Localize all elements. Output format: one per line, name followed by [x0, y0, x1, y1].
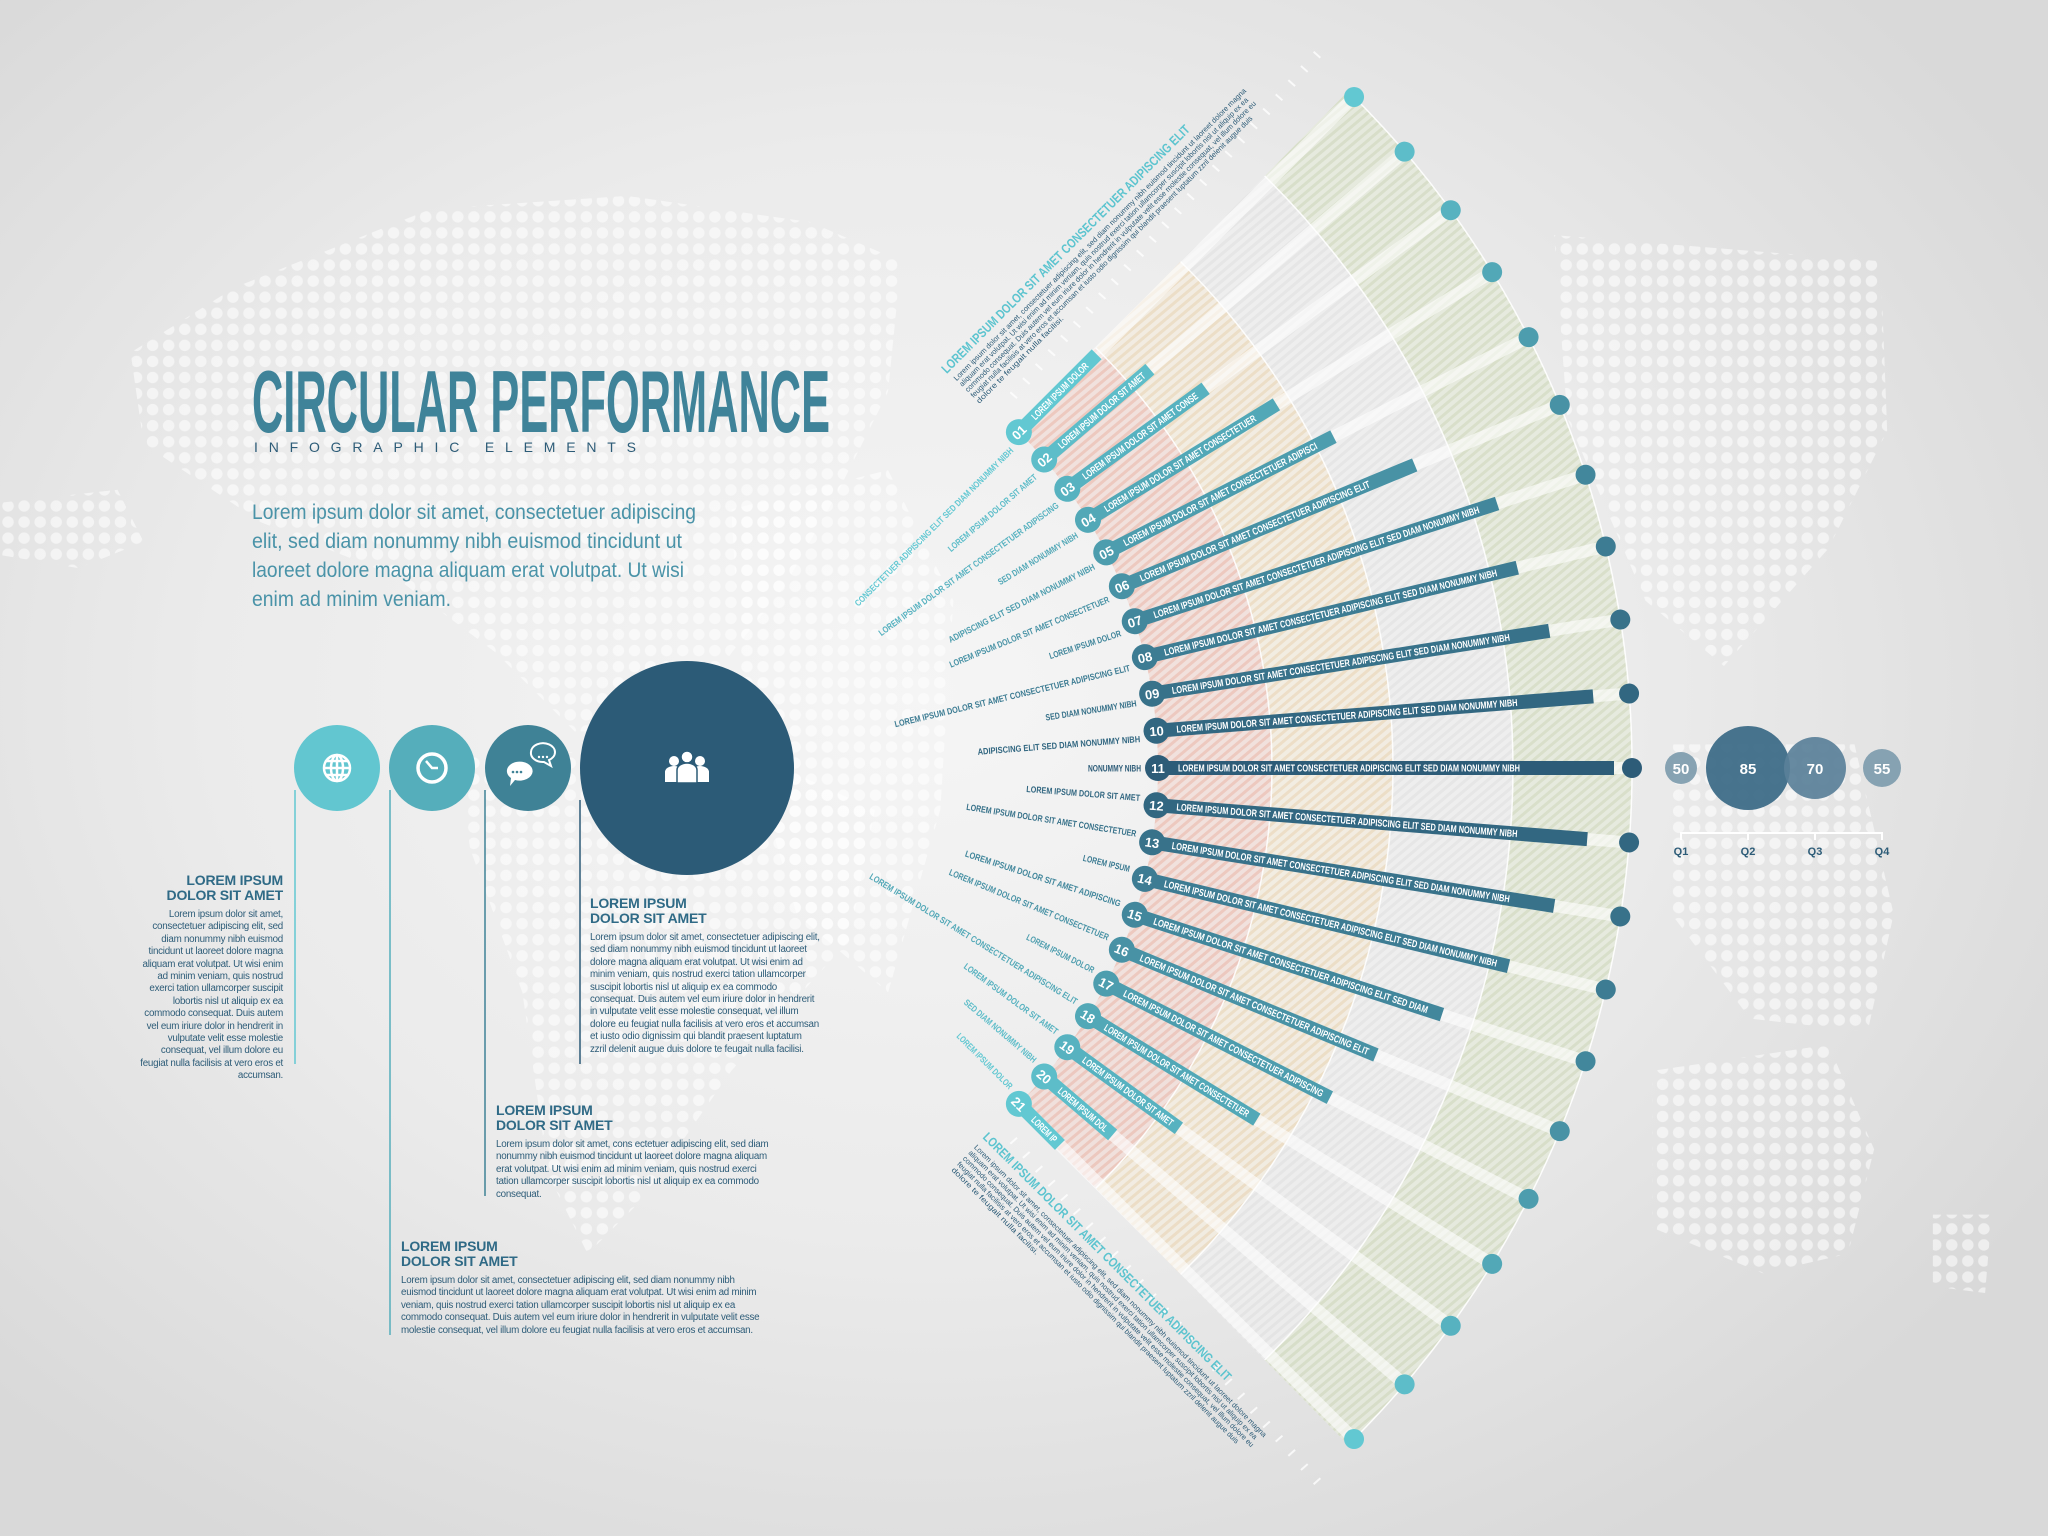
- ray 18: [860, 870, 1507, 1280]
- bubble chart Q1-Q4: Q2: [1741, 846, 1755, 858]
- ray 18: LOREM IPSUM DOLOR SIT AMET CONSECTETUER: [1102, 1023, 1251, 1120]
- bubble chart Q1-Q4: 55: [1874, 761, 1890, 778]
- text block: globe: DOLOR SIT AMET: [167, 887, 283, 903]
- bubble chart Q1-Q4: 70: [1807, 761, 1823, 778]
- ray 15: 15: [1125, 906, 1144, 925]
- ray 13: LOREM IPSUM DOLOR SIT AMET CONSECTETUER: [966, 802, 1137, 839]
- rotated text block: top: aliquam erat volutpat. Ut wisi enim ad minim veniam, quis nostrud exerci tation ullamcorper suscipit lobortis nisl ut aliquip ex ea: [957, 95, 1251, 388]
- icon: chat: [485, 725, 571, 811]
- ray 04: LOREM IPSUM DOLOR SIT AMET CONSECTETUER: [1103, 413, 1259, 515]
- band: gray ring: [1181, 176, 1513, 1360]
- intro paragraph: Lorem ipsum dolor sit amet, consectetuer adipiscing: [252, 501, 696, 524]
- ray 08: LOREM IPSUM DOLOR SIT AMET CONSECTETUER ADIPISCING ELIT: [893, 663, 1132, 729]
- ray 01: 01: [1009, 422, 1030, 443]
- rotated text block: top: feugiat nulla facilisis at vero eros et accumsan et iusto odio dignissim qui blandit praesent luptatum zzril delenit augue duis: [969, 114, 1255, 400]
- ray 02: LOREM IPSUM DOLOR SIT AMET: [946, 472, 1039, 554]
- ray 18: LOREM IPSUM DOLOR SIT AMET CONSECTETUER ADIPISCING ELIT: [868, 871, 1080, 1007]
- ray 14: LOREM IPSUM DOLOR SIT AMET CONSECTETUER ADIPISCING ELIT SED DIAM NONUMMY NIBH: [1163, 879, 1498, 970]
- ray 06: 06: [1112, 577, 1132, 596]
- band: green ring: [1265, 91, 1632, 1445]
- ray 12: LOREM IPSUM DOLOR SIT AMET CONSECTETUER ADIPISCING ELIT SED DIAM NONUMMY NIBH: [1176, 802, 1518, 840]
- text block: chat: LOREM IPSUM: [496, 1102, 593, 1118]
- ray 13: LOREM IPSUM DOLOR SIT AMET CONSECTETUER ADIPISCING ELIT SED DIAM NONUMMY NIBH: [1171, 841, 1510, 905]
- ray 16: LOREM IPSUM DOLOR SIT AMET CONSECTETUER: [948, 867, 1111, 942]
- ray 09: SED DIAM NONUMMY NIBH: [1045, 698, 1137, 723]
- intro paragraph: enim ad minim veniam.: [252, 588, 451, 611]
- ray 17: 17: [1096, 974, 1116, 994]
- ray 06: LOREM IPSUM DOLOR SIT AMET CONSECTETUER: [948, 594, 1111, 670]
- ray 16: 16: [1112, 941, 1131, 960]
- text: CIRCULAR PERFORMANCE: [252, 352, 830, 451]
- band: beige ring: [1096, 262, 1393, 1274]
- ray 17: [1018, 930, 1543, 1215]
- ray 01: LOREM IPSUM DOLOR: [1030, 361, 1092, 423]
- ray 11: NONUMMY NIBH: [1088, 764, 1141, 774]
- ray 10: 10: [1149, 723, 1164, 739]
- ray 01: [842, 81, 1370, 609]
- intro paragraph: [252, 501, 696, 611]
- ray 19: LOREM IPSUM DOLOR SIT AMET: [962, 961, 1060, 1037]
- ray 16: LOREM IPSUM DOLOR SIT AMET CONSECTETUER ADIPISCING ELIT: [1138, 953, 1370, 1058]
- text block: globe: Lorem ipsum dolor sit amet, consectetuer adipiscing elit, sed diam nonummy nibh euismod tincidunt ut laoreet dolore magna aliquam erat volutpat. Ut wisi enim ad minim veniam, quis nostrud exerci tation ullamcorper suscipit lobortis nisl ut aliquip ex ea commodo consequat. Duis autem vel eum iriure dolor in hendrerit in vulputate velit esse molestie consequat, vel illum dolore eu feugiat nulla facilisis at vero eros et accumsan.: [140, 909, 283, 1081]
- bubble chart Q1-Q4: Q3: [1808, 846, 1822, 858]
- ray 09: LOREM IPSUM DOLOR SIT AMET CONSECTETUER ADIPISCING ELIT SED DIAM NONUMMY NIBH: [1171, 633, 1511, 697]
- ray 08: LOREM IPSUM DOLOR SIT AMET CONSECTETUER ADIPISCING ELIT SED DIAM NONUMMY NIBH: [1163, 568, 1498, 659]
- ray 02: 02: [1034, 449, 1055, 470]
- ray 14: [1079, 851, 1619, 1005]
- rotated text block: bottom: LOREM IPSUM DOLOR SIT AMET CONSECTETUER ADIPISCING ELIT: [980, 1129, 1235, 1384]
- ray 02: [936, 135, 1421, 554]
- ray 09: 09: [1144, 686, 1161, 703]
- rotated text block: top: commodo consequat. Duis autem vel eum iriure dolor in hendrerit in vulputate velit esse molestie consequat, vel illum dolore eu: [963, 99, 1258, 394]
- ray 12: LOREM IPSUM DOLOR SIT AMET: [1026, 784, 1141, 803]
- ray 19: LOREM IPSUM DOLOR SIT AMET: [1080, 1055, 1175, 1129]
- ray 21: LOREM IP: [1028, 1115, 1059, 1145]
- ray 20: LOREM IPSUM DOL: [1055, 1086, 1109, 1135]
- ray 20: [953, 996, 1421, 1401]
- ray 20: 20: [1033, 1066, 1054, 1087]
- rotated text block: bottom: dolore te feugait nulla facilisi.: [950, 1165, 1041, 1257]
- ray 14: LOREM IPSUM: [1082, 853, 1131, 874]
- band: pink ring: [1016, 348, 1272, 1188]
- ray 21: 21: [1008, 1094, 1029, 1115]
- ray 10: ADIPISCING ELIT SED DIAM NONUMMY NIBH: [977, 734, 1141, 757]
- rotated text block: bottom: commodo consequat. Duis autem vel eum iriure dolor in hendrerit in vulputate velit esse molestie consequat, vel illum dolore eu: [961, 1154, 1256, 1449]
- ray 15: LOREM IPSUM DOLOR SIT AMET ADIPISCING: [964, 849, 1122, 909]
- rotated text block: bottom: feugiat nulla facilisis at vero eros et accumsan et iusto odio dignissim qui blandit praesent luptatum zzril delenit augue duis: [955, 1160, 1241, 1446]
- ray 05: 05: [1097, 543, 1116, 563]
- ray 15: [960, 847, 1599, 1077]
- intro paragraph: elit, sed diam nonummy nibh euismod tincidunt ut: [252, 530, 682, 553]
- ray 09: [1042, 605, 1632, 724]
- ray 18: 18: [1078, 1006, 1098, 1027]
- ray 10: LOREM IPSUM DOLOR SIT AMET CONSECTETUER ADIPISCING ELIT SED DIAM NONUMMY NIBH: [1176, 698, 1518, 736]
- text block: clock: [401, 1238, 760, 1336]
- ray 03: [868, 194, 1466, 639]
- ray 11: 11: [1151, 761, 1165, 776]
- ray 19: [954, 960, 1466, 1342]
- bubble chart Q1-Q4: Q1: [1674, 846, 1688, 858]
- ray 04: 04: [1078, 510, 1099, 530]
- text block: people: LOREM IPSUM: [590, 895, 687, 911]
- bubble chart Q1-Q4: [1665, 726, 1901, 858]
- text block: chat: [496, 1102, 768, 1200]
- ray 13: [963, 800, 1632, 931]
- ray 21: LOREM IPSUM DOLOR: [955, 1031, 1015, 1091]
- ray 21: [945, 1030, 1370, 1455]
- ray 07: 07: [1126, 612, 1144, 631]
- bubble chart Q1-Q4: 85: [1740, 761, 1756, 778]
- text block: people: DOLOR SIT AMET: [590, 910, 706, 926]
- subtitle: INFOGRAPHIC ELEMENTS: [254, 439, 636, 455]
- connector lines: [295, 790, 580, 1335]
- ray 14: 14: [1136, 870, 1154, 889]
- ray 03: 03: [1057, 479, 1078, 500]
- ray 19: 19: [1057, 1037, 1077, 1058]
- bubble chart Q1-Q4: Q4: [1875, 846, 1890, 858]
- rotated text block: bottom: aliquam erat volutpat. Ut wisi enim ad minim veniam, quis nostrud exerci tation ullamcorper suscipit lobortis nisl ut aliquip ex ea: [967, 1148, 1260, 1442]
- ray 07: LOREM IPSUM DOLOR SIT AMET CONSECTETUER ADIPISCING ELIT SED DIAM NONUMMY NIBH: [1152, 505, 1481, 621]
- rotated text block: bottom: Lorem ipsum dolor sit amet, consectetuer adipiscing elit, sed diam nonummy nibh euismod tincidunt ut laoreet dolore magna: [972, 1143, 1269, 1440]
- ray 04: SED DIAM NONUMMY NIBH: [996, 530, 1080, 587]
- rotated text block: top: LOREM IPSUM DOLOR SIT AMET CONSECTETUER ADIPISCING ELIT: [938, 122, 1193, 376]
- ray 04: [988, 256, 1507, 588]
- ray 05: ADIPISCING ELIT SED DIAM NONUMMY NIBH: [947, 562, 1097, 645]
- icon: clock: [389, 725, 475, 811]
- rotated text block: top: dolore te feugait nulla facilisi.: [974, 314, 1066, 405]
- text block: chat: Lorem ipsum dolor sit amet, cons ectetuer adipiscing elit, sed diam nonummy nibh euismod tincidunt ut laoreet dolore magna aliquam erat volutpat. Ut wisi enim ad minim veniam, quis nostrud exerci tation ullamcorper suscipit lobortis nisl ut aliquip ex ea commodo consequat.: [496, 1139, 768, 1200]
- ray 05: [940, 321, 1543, 646]
- icon: people: [580, 661, 794, 875]
- ray 17: LOREM IPSUM DOLOR: [1025, 932, 1096, 975]
- ray 13: 13: [1144, 834, 1160, 851]
- text block: globe: LOREM IPSUM: [186, 872, 283, 888]
- ray 07: LOREM IPSUM DOLOR: [1048, 628, 1123, 661]
- ray 16: [942, 865, 1574, 1147]
- text block: clock: Lorem ipsum dolor sit amet, consectetuer adipiscing elit, sed diam nonummy nibh euismod tincidunt ut laoreet dolore magna aliquam erat volutpat. Ut wisi enim ad minim veniam, quis nostrud exerci tation ullamcorper suscipit lobortis nisl ut aliquip ex ea commodo consequat. Duis autem vel eum iriure dolor in hendrerit in vulputate velit esse molestie consequat, vel illum dolore eu feugiat nulla facilisis at vero eros et accumsan.: [401, 1275, 759, 1336]
- ray 11: LOREM IPSUM DOLOR SIT AMET CONSECTETUER ADIPISCING ELIT SED DIAM NONUMMY NIBH: [1178, 764, 1520, 774]
- ray 06: [942, 389, 1574, 671]
- fan chart: [842, 48, 1642, 1488]
- ray 03: LOREM IPSUM DOLOR SIT AMET CONSE: [1081, 391, 1201, 482]
- ray 12: [1025, 782, 1640, 856]
- ray 05: LOREM IPSUM DOLOR SIT AMET CONSECTETUER ADIPISCI: [1122, 441, 1320, 549]
- ray 08: [890, 531, 1619, 730]
- text block: clock: LOREM IPSUM: [401, 1238, 498, 1254]
- ray 15: LOREM IPSUM DOLOR SIT AMET CONSECTETUER ADIPISCING ELIT SED DIAM: [1152, 917, 1429, 1016]
- ray 11: [1088, 755, 1642, 781]
- ray 02: LOREM IPSUM DOLOR SIT AMET: [1056, 371, 1148, 451]
- ray 12: 12: [1149, 798, 1164, 814]
- text block: chat: DOLOR SIT AMET: [496, 1117, 612, 1133]
- ray 20: SED DIAM NONUMMY NIBH: [962, 997, 1038, 1065]
- intro paragraph: laoreet dolore magna aliquam erat volutpat. Ut wisi: [252, 559, 684, 582]
- ray 08: 08: [1136, 649, 1154, 667]
- text block: people: Lorem ipsum dolor sit amet, consectetuer adipiscing elit, sed diam nonummy nibh euismod tincidunt ut laoreet dolore magna aliquam erat volutpat. Ut wisi enim ad minim veniam, quis nostrud exerci tation ullamcorper suscipit lobortis nisl ut aliquip ex ea commodo consequat. Duis autem vel eum iriure dolor in hendrerit in vulputate velit esse molestie consequat, vel illum dolore eu feugiat nulla facilisis at vero eros et accumsan et iusto odio dignissim qui blandit praesent luptatum zzril delenit augue duis dolore te feugait nulla facilisi.: [590, 932, 820, 1055]
- ray 17: LOREM IPSUM DOLOR SIT AMET CONSECTETUER ADIPISCING: [1121, 989, 1325, 1100]
- ray 07: [1043, 459, 1599, 662]
- ray 06: LOREM IPSUM DOLOR SIT AMET CONSECTETUER ADIPISCING ELIT: [1139, 480, 1372, 585]
- ray 03: LOREM IPSUM DOLOR SIT AMET CONSECTETUER ADIPISCING: [877, 500, 1061, 638]
- text block: clock: DOLOR SIT AMET: [401, 1253, 517, 1269]
- bubble chart Q1-Q4: 50: [1673, 761, 1689, 778]
- rotated text block: top: Lorem ipsum dolor sit amet, consectetuer adipiscing elit, sed diam nonummy nibh euismod tincidunt ut laoreet dolore magna: [952, 86, 1249, 383]
- icon: globe: [294, 725, 380, 811]
- ray 10: [976, 680, 1640, 758]
- ray 01: CONSECTETUER ADIPISCING ELIT SED DIAM NONUMMY NIBH: [853, 446, 1015, 608]
